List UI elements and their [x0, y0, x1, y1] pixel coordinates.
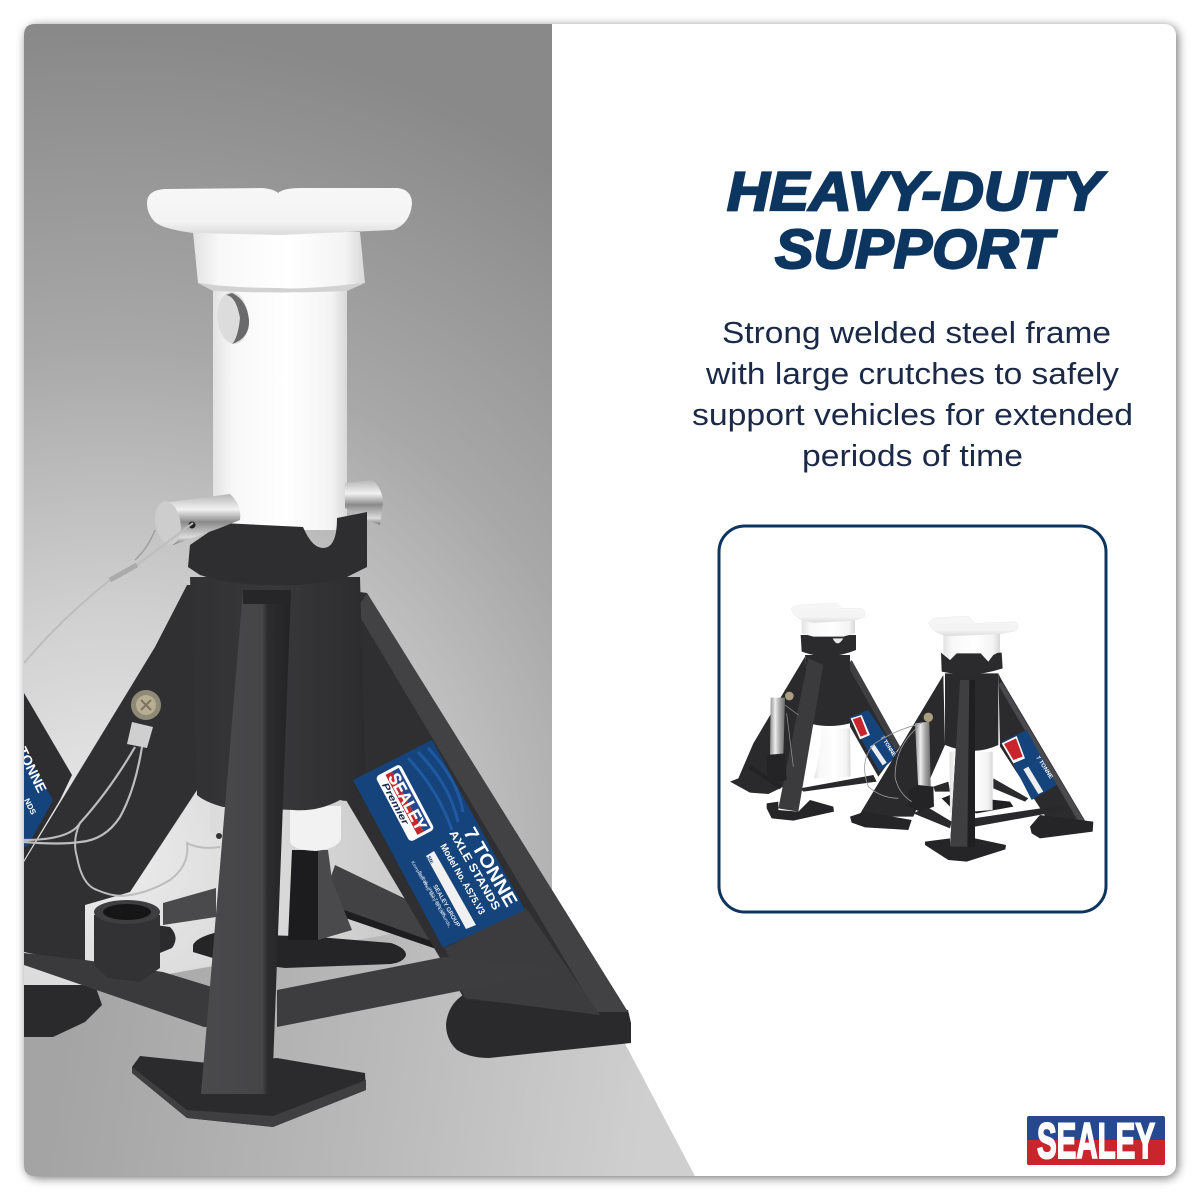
- label on right leg: Kempson Way, Bury St Edmunds,: [410, 860, 452, 928]
- front leg: [201, 590, 291, 1094]
- body text: [692, 315, 1133, 473]
- locking pin hole: [218, 292, 249, 344]
- heading: HEAVY-DUTY: [727, 160, 1107, 222]
- safety cables: [24, 523, 220, 896]
- rear pin: [345, 480, 383, 525]
- studio backdrop: [24, 24, 552, 1024]
- white saddle crutch: [147, 188, 412, 235]
- black top collar with notch: [188, 512, 367, 585]
- label on right leg: 7 TONNE: [459, 824, 521, 911]
- right foot: [446, 995, 631, 1058]
- collar shadow line: [198, 283, 365, 292]
- cable ferrule: [127, 722, 153, 748]
- left base bar: [24, 953, 212, 1027]
- rear stand leg and label: [24, 693, 102, 1037]
- Sealey Premier badge: SEALEY: [384, 770, 430, 834]
- body text: periods of time: [802, 438, 1023, 473]
- inset panel: pair of stands: [719, 526, 1106, 912]
- left stand in pair: 7 TONNE: [879, 735, 897, 758]
- white collar: [193, 232, 365, 288]
- main axle stand: [14, 188, 631, 1127]
- label on right leg: Model No. AS75.V3: [437, 842, 487, 917]
- heading: SUPPORT: [775, 218, 1058, 280]
- body text: Strong welded steel frame: [722, 315, 1111, 350]
- base socket: [94, 900, 160, 982]
- label on right leg: [353, 740, 525, 948]
- label on right leg: AXLE STANDS: [446, 828, 502, 913]
- Sealey Premier badge: Premier: [379, 781, 411, 828]
- bolt: [131, 690, 161, 720]
- front foot: [132, 1056, 366, 1127]
- small rear disc: [160, 926, 176, 953]
- right leg: [340, 590, 628, 1015]
- heading: [727, 160, 1107, 280]
- right stand in pair: [850, 616, 1093, 862]
- body text: with large crutches to safely: [705, 356, 1120, 391]
- body text: support vehicles for extended: [692, 397, 1133, 432]
- front foot edge: [132, 1067, 366, 1127]
- upper white tube: [213, 280, 347, 530]
- lower white tube: [216, 806, 341, 851]
- rear stand label: [24, 746, 53, 847]
- label on right leg: SEALEY GROUP: [431, 884, 460, 929]
- centre body: [190, 577, 366, 810]
- rear base bars: [163, 865, 445, 952]
- lower dark tube: [288, 850, 352, 940]
- rear stand label: TONNE: [14, 744, 50, 795]
- floor: [24, 934, 695, 1176]
- label on right leg: SN:: [425, 855, 435, 866]
- photo panel background: [24, 24, 695, 1176]
- right stand in pair: 7 TONNE: [1034, 755, 1054, 780]
- front pin: [152, 494, 240, 547]
- left stand in pair: [730, 603, 900, 821]
- rear stand label: NDS: [22, 797, 38, 817]
- label on right leg: Suffolk, IP32 7AR, UK: [417, 870, 448, 918]
- left leg: [24, 585, 197, 960]
- centre foot disc: [193, 933, 406, 968]
- front right base bar: [277, 957, 462, 1027]
